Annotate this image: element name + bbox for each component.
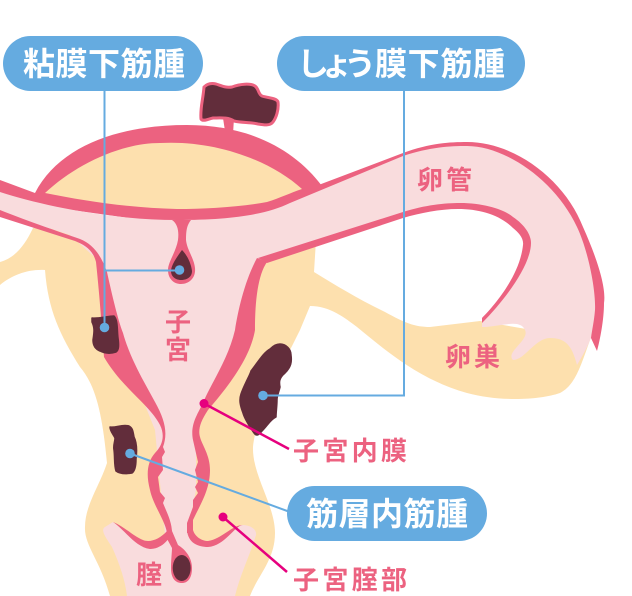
label: vaginal part of cervix: 子宮腟部	[293, 565, 407, 595]
right vaginal fornix	[187, 525, 243, 547]
fallopian tube outer wall	[300, 142, 604, 351]
pill label: submucosal fibroid: 粘膜下筋腫	[23, 46, 185, 82]
label: uterus: 宮	[165, 335, 191, 365]
uterine dome cream fill	[45, 143, 302, 209]
label: ovary: 卵巣	[445, 342, 500, 372]
vagina (light pink)	[103, 522, 256, 596]
label: fallopian tube: 卵管	[417, 165, 472, 195]
pill label: subserosal fibroid: しょう	[299, 46, 373, 82]
muscle layer and ovary (cream)	[0, 228, 590, 596]
label: uterus: 子	[165, 307, 191, 337]
fibroid: subserosal, on uterine top	[201, 83, 278, 134]
pill label: intramural fibroid: 筋層内筋腫	[306, 496, 468, 532]
fibroid: right outer wall	[240, 344, 291, 435]
leader: endometrium	[200, 399, 289, 449]
leader: submucosal fibroid	[100, 88, 184, 332]
right uterine wall	[187, 258, 267, 533]
fibroid: submucosal polyp in cavity	[168, 220, 195, 284]
left uterine wall	[0, 210, 172, 533]
fibroid: intramural	[110, 425, 137, 474]
left vaginal fornix	[113, 522, 172, 549]
fibroid: left wall	[92, 316, 119, 353]
leader: intramural fibroid	[125, 449, 290, 512]
pill label: subserosal fibroid: 膜下筋腫	[375, 46, 505, 82]
pill label: submucosal fibroid	[3, 36, 203, 91]
leader: subserosal fibroid	[258, 88, 404, 400]
pill label: subserosal fibroid	[277, 36, 525, 91]
label: endometrium: 子宮内膜	[293, 436, 407, 466]
lower fallopian tube wall	[258, 203, 531, 323]
pill label: intramural fibroid	[287, 486, 487, 541]
uterine cavity and tube (light pink)	[0, 146, 595, 535]
leader: vaginal part of cervix	[218, 512, 287, 572]
label: uterus	[165, 307, 191, 365]
fibroid: vaginal polyp	[166, 531, 192, 583]
label: vagina: 腟	[136, 560, 162, 590]
uterine dome outer wall	[0, 125, 330, 228]
